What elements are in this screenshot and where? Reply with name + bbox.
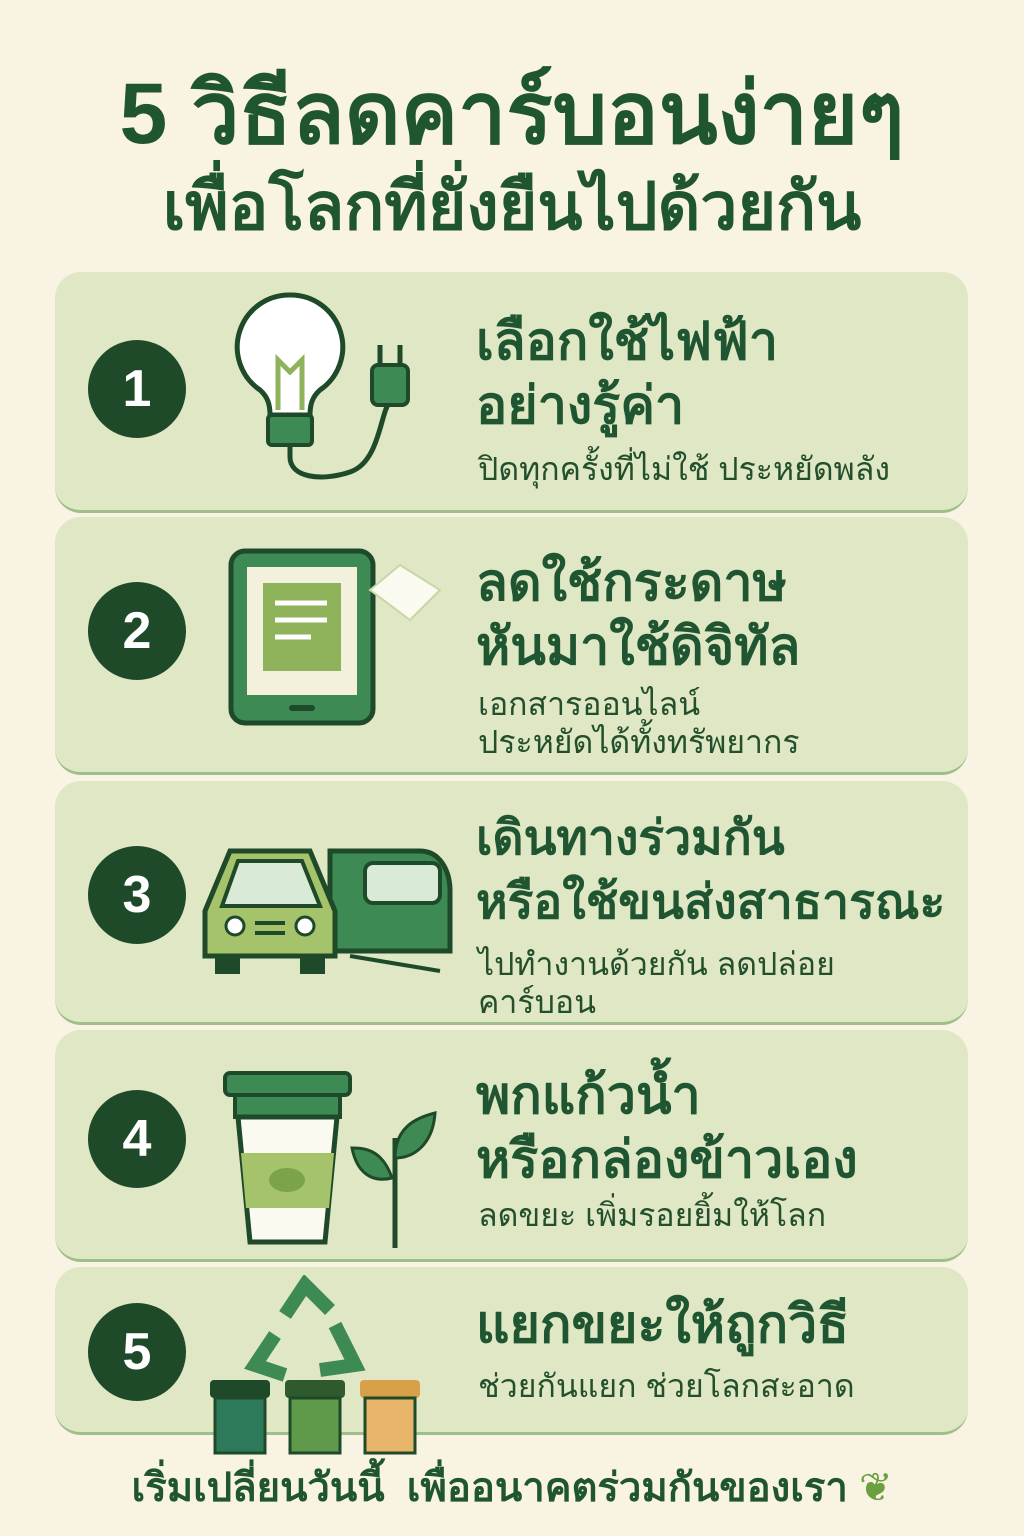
number 5: 5 (123, 1323, 151, 1381)
number 1 (88, 340, 186, 438)
text: ไปทำงานด้วยกัน ลดปล่อย (478, 946, 835, 982)
heading: หันมาใช้ดิจิทัล (476, 618, 800, 676)
text (478, 686, 800, 760)
panel: 1 electricity (55, 272, 968, 513)
number 3 (88, 846, 186, 944)
heading: หรือกล่องข้าวเอง (476, 1131, 858, 1189)
text: คาร์บอน (478, 984, 596, 1020)
icon: cup and plant (223, 1071, 437, 1248)
panel: 5 recycle (55, 1267, 968, 1435)
number 2 (88, 582, 186, 680)
text: ช่วยกันแยก ช่วยโลกสะอาด (478, 1368, 855, 1404)
text: ปิดทุกครั้งที่ไม่ใช้ ประหยัดพลัง (478, 451, 890, 487)
heading: ลดใช้กระดาษ (476, 554, 787, 612)
heading (476, 552, 800, 676)
number 5 (88, 1303, 186, 1401)
heading: แยกขยะให้ถูกวิธี (476, 1296, 849, 1354)
heading (476, 312, 778, 438)
heading: เลือกใช้ไฟฟ้า (476, 313, 778, 371)
number 4 (88, 1090, 186, 1188)
text: ลดขยะ เพิ่มรอยยิ้มให้โลก (478, 1197, 826, 1233)
number 2: 2 (123, 602, 151, 660)
footer: เริ่มเปลี่ยนวันนี้ เพื่ออนาคตร่วมกันของเรา ❦ (132, 1466, 892, 1510)
heading: อย่างรู้ค่า (476, 377, 684, 435)
icon: car and train (202, 848, 452, 974)
text: เอกสารออนไลน์ (478, 686, 700, 722)
icon: light bulb (234, 292, 410, 480)
icon: tablet (228, 548, 442, 726)
number 4: 4 (123, 1110, 151, 1168)
text (476, 946, 835, 1020)
heading (476, 812, 945, 929)
number 3: 3 (123, 866, 151, 924)
icon: recycle bins (210, 1275, 420, 1454)
text: ประหยัดได้ทั้งทรัพยากร (478, 724, 800, 760)
heading: หรือใช้ขนส่งสาธารณะ (476, 876, 945, 929)
panel: 3 transport (55, 781, 968, 1025)
subtitle: เพื่อโลกที่ยั่งยืนไปด้วยกัน (163, 169, 861, 243)
panel: 2 paper (55, 517, 968, 775)
heading: เดินทางร่วมกัน (476, 812, 785, 865)
heading: พกแก้วน้ำ (476, 1067, 701, 1125)
number 1: 1 (123, 360, 151, 418)
panel: 4 reusable (55, 1030, 968, 1262)
heading (476, 1057, 858, 1189)
title: 5 วิธีลดคาร์บอนง่ายๆ (120, 66, 904, 162)
